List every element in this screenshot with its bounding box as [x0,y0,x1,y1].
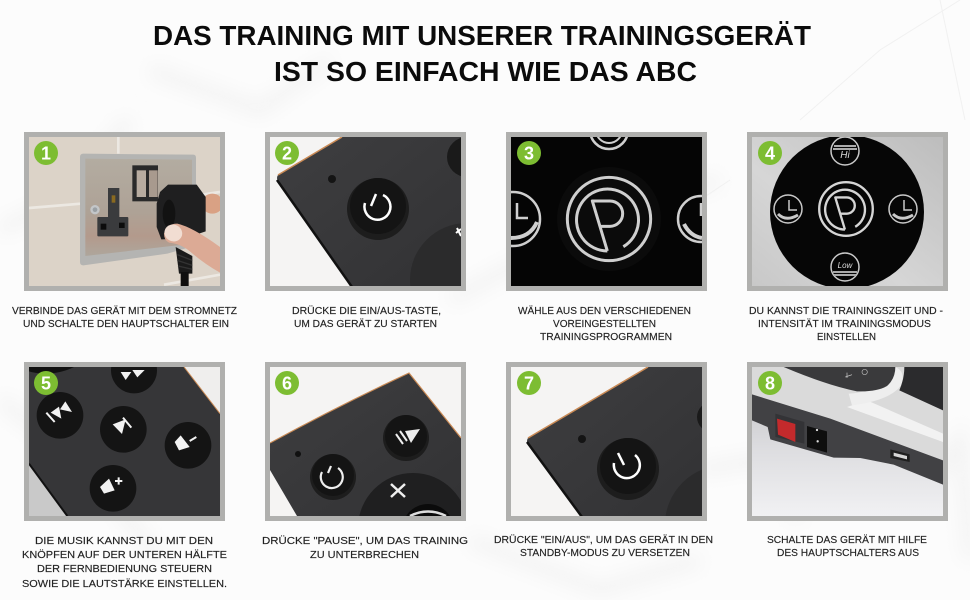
badge 4: 4 [765,144,775,164]
panel: step 4 time and intensity [747,132,948,343]
badge 1 [34,141,58,165]
photo: wall socket with plug [29,137,220,286]
caption 4: INTENSITÄT IM TRAININGSMODUS [758,318,931,330]
caption 8 [767,534,927,559]
panel: step 5 music buttons [22,347,227,590]
caption 1 [12,305,238,330]
photo: control disc: Hi [840,150,850,161]
badge 8: 8 [765,374,775,394]
panel: step 7 standby [494,362,785,585]
panel: step 6 pause [262,362,468,583]
caption 3 [518,305,691,343]
caption 5: SOWIE DIE LAUTSTÄRKE EINSTELLEN. [22,578,227,590]
caption 7 [494,534,713,559]
badge 5: 5 [41,374,51,394]
photo: remote media buttons [29,367,220,516]
caption 5: DIE MUSIK KANNST DU MIT DEN [35,535,213,547]
caption 1: UND SCHALTE DEN HAUPTSCHALTER EIN [23,318,229,330]
caption 8: SCHALTE DAS GERÄT MIT HILFE [767,534,927,546]
caption 7: DRÜCKE "EIN/AUS", UM DAS GERÄT IN DEN [494,534,713,546]
caption 1: VERBINDE DAS GERÄT MIT DEM STROMNETZ [12,305,238,317]
photo: device side with switch [752,367,943,516]
badge 5 [34,371,58,395]
title: IST SO EINFACH WIE DAS ABC [274,56,697,87]
caption 5: KNÖPFEN AUF DER UNTEREN HÄLFTE [22,549,227,561]
caption 6: ZU UNTERBRECHEN [310,549,419,561]
caption 5 [22,535,227,590]
badge 8 [758,371,782,395]
badge 2 [275,141,299,165]
caption 5: DER FERNBEDIENUNG STEUERN [37,563,212,575]
badge 1: 1 [41,144,51,164]
panel: step 2 power button [265,132,524,337]
panel: step 1 plug in [12,132,238,330]
badge 3 [517,141,541,165]
caption 7: STANDBY-MODUS ZU VERSETZEN [520,547,690,559]
title: DAS TRAINING MIT UNSERER TRAININGSGERÄT [153,20,811,51]
panel: step 8 main switch [747,362,948,559]
title [153,20,811,87]
badge 7 [517,371,541,395]
caption 3: WÄHLE AUS DEN VERSCHIEDENEN [518,305,691,317]
badge 3: 3 [524,144,534,164]
caption 4 [749,305,943,343]
badge 4 [758,141,782,165]
badge 6: 6 [282,374,292,394]
photo: P button close-up [511,137,702,286]
caption 8: DES HAUPTSCHALTERS AUS [777,547,919,559]
photo: remote power button [270,137,461,286]
caption 2: DRÜCKE DIE EIN/AUS-TASTE, [292,305,441,317]
photo: control disc [752,137,943,286]
badge 2: 2 [282,144,292,164]
caption 4: EINSTELLEN [817,331,876,343]
caption 3: TRAININGSPROGRAMMEN [540,331,672,343]
caption 3: VOREINGESTELLTEN [553,318,656,330]
caption 4: DU KANNST DIE TRAININGSZEIT UND - [749,305,943,317]
badge 6 [275,371,299,395]
caption 6: DRÜCKE "PAUSE", UM DAS TRAINING [262,535,468,547]
caption 2: UM DAS GERÄT ZU STARTEN [294,318,437,330]
panel: step 3 program button [486,111,724,343]
photo: remote pause button [270,367,461,516]
caption 6 [262,535,468,561]
caption 2 [292,305,441,330]
photo: control disc: Low [838,261,854,270]
photo: remote power button [511,367,702,516]
badge 7: 7 [524,374,534,394]
